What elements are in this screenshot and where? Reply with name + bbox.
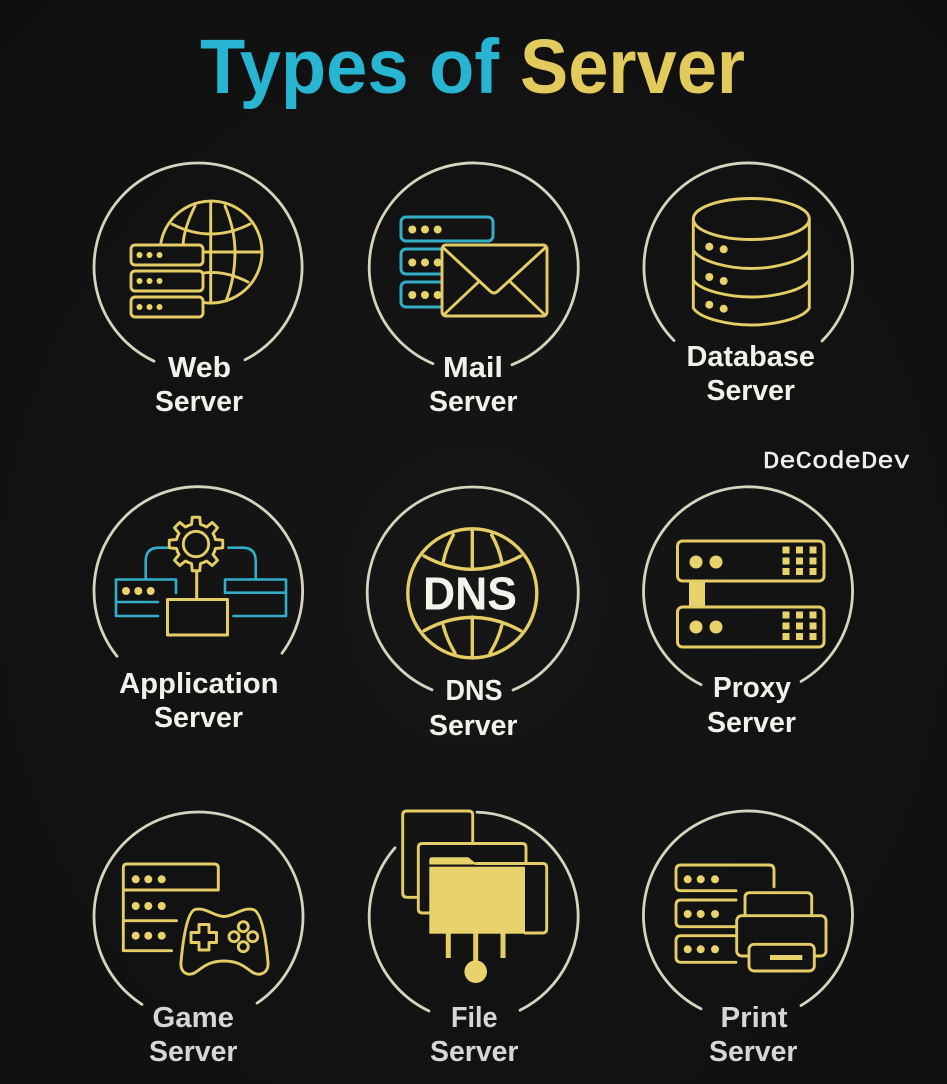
label: application server: Application [119, 668, 278, 700]
panel: dns server [367, 487, 578, 742]
label: database server: Server [706, 375, 795, 407]
label: web server: Server [155, 386, 243, 418]
title [200, 24, 745, 110]
panel: game server [94, 812, 303, 1068]
icon: envelope with servers [401, 217, 547, 316]
label: application server: Server [154, 702, 243, 734]
icon: game controller and servers [123, 864, 268, 974]
label: game server: Server [149, 1036, 238, 1068]
title: Server [520, 24, 745, 110]
watermark: DeCodeDev [763, 449, 910, 476]
label: proxy server: Server [707, 707, 796, 739]
icon: dns globe [408, 529, 537, 658]
label: game server: Game [152, 1002, 234, 1034]
label: proxy server [707, 672, 796, 739]
label: dns server: DNS [446, 675, 502, 707]
label: database server [686, 341, 815, 407]
label: proxy server: Proxy [713, 672, 791, 704]
panel: print server [643, 811, 852, 1068]
icon: two linked server racks [678, 541, 824, 647]
label: file server: File [451, 1002, 498, 1034]
label: database server: Database [686, 341, 815, 373]
icon: database cylinder [693, 198, 809, 325]
panel: application server [94, 487, 303, 734]
panel: mail server [369, 163, 578, 418]
label: print server: Server [709, 1036, 798, 1068]
icon: printer and servers [676, 865, 826, 971]
panel: file server [369, 811, 578, 1068]
label: dns server: Server [429, 710, 518, 742]
icon: gear and connected servers [116, 517, 286, 635]
label: dns server [429, 675, 518, 742]
label: game server [149, 1002, 238, 1068]
panel: database server [644, 163, 853, 407]
title: Types of [200, 24, 499, 110]
label: mail server [429, 352, 518, 418]
label: web server: Web [168, 352, 231, 384]
label: print server [709, 1002, 798, 1068]
icon: dns globe: DNS [423, 568, 517, 620]
label: mail server: Server [429, 386, 518, 418]
panel: web server [94, 163, 302, 418]
panel: proxy server [644, 487, 853, 739]
label: file server [430, 1002, 518, 1068]
icon: folders with network node [403, 811, 547, 983]
label: print server: Print [720, 1002, 788, 1034]
icon: web globe with servers [131, 201, 262, 317]
label: mail server: Mail [443, 352, 503, 384]
label: web server [155, 352, 243, 418]
label: file server: Server [430, 1036, 518, 1068]
label: application server [119, 668, 278, 734]
